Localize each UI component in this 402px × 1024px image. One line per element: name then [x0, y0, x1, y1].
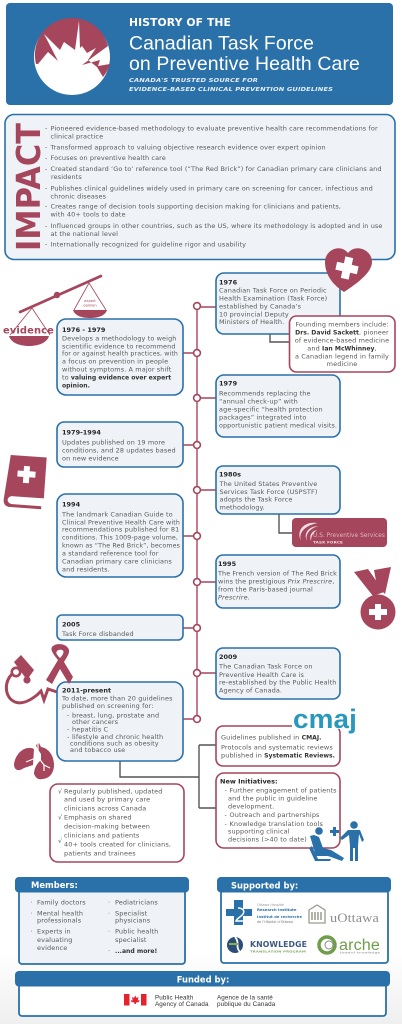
event: 1994: 1994 [62, 501, 81, 509]
event: 2011-present: - [67, 725, 70, 733]
panel: members: · [30, 909, 33, 917]
callout: new initiatives: Outreach and partnerships [230, 811, 320, 819]
funder name: Agence de la santé [217, 994, 273, 1002]
tagline: EVIDENCE-BASED CLINICAL PREVENTION GUIDELINES [129, 87, 333, 93]
callout: tools and reach: and used by primary care [64, 796, 150, 804]
icon: Canadian flag [124, 994, 146, 1006]
impact list: clinical practice [50, 132, 103, 140]
callout: new initiatives: development. [228, 802, 274, 810]
logo: Knowledge Translation Program: KNOWLEDGE [250, 940, 307, 949]
event: 2011-present: To date, more than 20 guidelines [61, 695, 173, 703]
callout: new initiatives [216, 773, 340, 848]
event: 1976-1979: Develops a methodology to weigh [62, 334, 177, 342]
impact list: - [45, 154, 48, 162]
event: 1995: The French version of The Red Brick [217, 570, 337, 578]
event: 1979: packages” integrated into [219, 414, 306, 422]
callout: tools and reach: √ [58, 837, 63, 845]
panel: members: evidence [37, 944, 67, 952]
event: 2009 [216, 648, 340, 699]
panel: members: · [108, 898, 110, 906]
callout: publications: Guidelines published in CMAJ. [221, 733, 321, 741]
event: 1980s: methodology. [220, 503, 265, 511]
impact list: Internationally recognized for guideline rigor and usability [50, 240, 246, 248]
event: 1994 [57, 494, 183, 577]
callout: new initiatives: supporting clinical [228, 828, 290, 836]
event: 2011-present: hepatitis C [72, 725, 108, 733]
callout: tools and reach: √ [58, 788, 63, 796]
panel: members: Pediatricians [115, 898, 158, 906]
panel: members: ...and more! [115, 948, 157, 955]
panel: members: Family doctors [37, 898, 86, 906]
event: 2011-present [57, 682, 183, 761]
panel: members: Specialist [115, 909, 148, 917]
logo: U.S. Preventive Services Task Force [292, 518, 387, 547]
panel: members: · [108, 928, 110, 936]
icon: maple leaf logo [34, 18, 110, 95]
event: 1979: 1979 [219, 380, 238, 388]
impact list: Focuses on preventive health care [50, 154, 166, 162]
event: 1976: 1976 [219, 279, 238, 287]
callout: new initiatives: and the public in guideline [228, 794, 318, 802]
logo: arche: arche [339, 937, 380, 954]
funder name: publique du Canada [217, 1001, 276, 1008]
event: 2005: Task Force disbanded [61, 630, 134, 638]
event: 2011-present: breast, lung, prostate and [72, 712, 159, 720]
event: 1976-1979: 1976 - 1979 [62, 326, 106, 334]
panel: members: Members: [31, 880, 78, 890]
event: 2009: The Canadian Task Force on [218, 663, 313, 671]
event: 1976: Health Examination (Task Force) [219, 294, 327, 302]
event: 1994: The landmark Canadian Guide to [61, 510, 173, 518]
impact list [45, 124, 383, 248]
impact list: - [45, 184, 48, 192]
panel: funded by [15, 971, 390, 1016]
logo: Ottawa Hospital Research Institute [226, 900, 302, 925]
callout: new initiatives: - [224, 820, 228, 828]
callout: founding members: a Canadian legend in family [295, 352, 389, 360]
logo: uOttawa: uOttawa [330, 911, 379, 925]
panel: members: Public health [115, 928, 158, 936]
panel: members: Experts in [37, 928, 71, 936]
impact list: at the national level [50, 230, 118, 238]
impact list: with 40+ tools to date [50, 211, 126, 219]
icon: medal [354, 567, 396, 630]
event: 1976-1979: to valuing evidence over expert [62, 374, 171, 382]
event: 1995 [216, 555, 340, 608]
callout: new initiatives: decisions (>40 to date) [228, 836, 307, 844]
event: 1976-1979: scientific evidence to recommend [62, 342, 176, 350]
impact list: - [45, 124, 48, 132]
impact list: - [45, 144, 48, 152]
impact list: Transformed approach to valuing objective research evidence over expert opinion [50, 144, 326, 152]
impact list: Creates range of decision tools supporting decision making for clinicians and patients, [50, 203, 341, 211]
panel: members: specialist [115, 936, 147, 944]
callout: founding members: and Ian McWhinney, [307, 344, 377, 352]
panel: members: Mental health [37, 909, 83, 917]
heading: IMPACT: IMPACT [9, 123, 48, 251]
callout: publications: Protocols and systematic reviews [221, 744, 333, 752]
panel: members: · [108, 909, 110, 917]
event: 2009: re-established by the Public Health [219, 679, 336, 687]
logo: Ottawa Hospital Research Institute: Institut de recherche [257, 914, 302, 919]
event: 1994: conditions. This 1009-page volume, [62, 534, 178, 542]
event: 1976-1979 [57, 319, 183, 395]
event: 1995: Prescrire. [218, 594, 250, 602]
event: 1979-1994: Updates published on 19 more [62, 438, 165, 446]
funder name: Public Health [155, 994, 194, 1002]
event: 1980s: Services Task Force (USPSTF) [220, 488, 318, 496]
callout: tools and reach: Emphasis on shared [64, 813, 132, 821]
callout: tools and reach: √ [58, 813, 63, 821]
callout: new initiatives: - [224, 786, 228, 794]
event: 2011-present: lifestyle and chronic health [72, 733, 163, 741]
event: 1994: and residents. [62, 566, 110, 574]
impact list: chronic diseases [50, 192, 107, 200]
tagline: CANADA'S TRUSTED SOURCE FOR [129, 78, 258, 84]
event: 1976: established by Canada’s [219, 302, 302, 310]
event: 2011-present: and tobacco use [70, 746, 125, 754]
icon: heart with cross [325, 248, 372, 292]
callout: new initiatives: New Initiatives: [220, 777, 278, 785]
icon: awareness ribbon [46, 644, 73, 684]
impact list: Created standard ‘Go to’ reference tool (“The Red Brick”) for Canadian primary care clinicians and [50, 165, 382, 173]
logo: Ottawa Hospital Research Institute: Research Institute [257, 907, 297, 912]
event: 1976-1979: without symptoms. A major shift [62, 365, 172, 373]
event: 1976-1979: a focus on prevention in people [62, 358, 168, 366]
impact list: Pioneered evidence-based methodology to evaluate preventive health care recommendations for [50, 124, 378, 132]
event: 2011-present: conditions such as obesity [70, 740, 159, 748]
panel: members: physicians [115, 917, 151, 925]
callout: founding members: medicine [327, 360, 357, 368]
callout: tools and reach: patients and trainees [64, 849, 136, 857]
logo: Knowledge Translation Program: TRANSLATION PROGRAM [250, 950, 306, 954]
event: 1994: known as “The Red Brick”, becomes [62, 542, 180, 550]
event: 1980s: adopts the Task Force [220, 495, 292, 503]
callout: founding members: of evidence-based medicine [295, 336, 389, 344]
event: 2005 [57, 615, 183, 640]
event: 1979-1994: 1979-1994 [62, 429, 101, 437]
panel: supported by: Supported by: [231, 880, 298, 890]
impact list: Influenced groups in other countries, such as the US, where its methodology is adopted and in use [50, 222, 383, 230]
icon: scale, evidence outweighs expert opinion: expert [84, 299, 96, 303]
event: 1994: recommendations published for 81 [62, 526, 179, 534]
icon: scale, evidence outweighs expert opinion [3, 276, 107, 346]
funder name: Agency of Canada [155, 1001, 209, 1008]
event: 1979: Recommends replacing the [219, 389, 311, 397]
callout: tools and reach: Regularly published, updated [64, 788, 163, 796]
logo: Knowledge Translation Program [227, 937, 307, 954]
event: 2011-present: - [67, 712, 70, 720]
logo: Ottawa Hospital Research Institute: Ottawa Hospital [257, 903, 284, 907]
event: 1976: Ministers of Health. [219, 318, 284, 326]
logo: uOttawa [309, 905, 379, 925]
event: 1979-1994 [57, 422, 183, 467]
logo: U.S. Preventive Services Task Force: U.S. Preventive Services [313, 532, 385, 539]
event: 1976-1979: opinion. [62, 383, 90, 390]
event: 1994: a standard reference tool for [62, 550, 159, 558]
callout: new initiatives: Further engagement of patients [230, 786, 337, 794]
callout: tools and reach: clinicians across Canada [64, 805, 146, 813]
logo: Ottawa Hospital Research Institute: de l’Hôpital d’Ottawa [257, 920, 293, 924]
event: 1994: Clinical Preventive Health Care with [62, 518, 180, 526]
impact list: Publishes clinical guidelines widely used in primary care on screening for cancer, infectious and [50, 184, 373, 192]
event: 1979: opportunistic patient medical visits. [219, 422, 337, 430]
title: Canadian Task Force [129, 32, 314, 54]
panel: members: evaluating [37, 936, 72, 944]
panel: supported by [217, 877, 391, 963]
impact list: - [45, 203, 48, 211]
event: 2005: 2005 [62, 620, 81, 628]
impact list: residents [51, 173, 82, 181]
panel: members: · [108, 947, 110, 955]
event: 2011-present: 2011-present [62, 687, 111, 695]
impact list: - [45, 222, 48, 230]
connectors [120, 334, 292, 808]
callout: new initiatives: - [224, 811, 228, 819]
impact list: - [45, 240, 48, 248]
callout: new initiatives: Knowledge translation tools [230, 820, 323, 828]
event: 2011-present: other cancers [72, 718, 119, 726]
event: 1979-1994: conditions, and 28 updates based [62, 446, 176, 454]
event: 1980s [216, 466, 340, 514]
timeline axis [183, 303, 216, 722]
event: 1994: Canadian primary care clinicians [62, 558, 172, 566]
event: 1980s: The United States Preventive [218, 480, 317, 488]
icon: scale, evidence outweighs expert opinion: evidence [3, 326, 54, 336]
panel: impact [5, 114, 395, 260]
logo: U.S. Preventive Services Task Force: TASK FORCE [313, 540, 343, 544]
callout: tools and reach: 40+ tools created for clinicians, [64, 841, 171, 849]
event: 2009: Agency of Canada. [219, 686, 282, 694]
event: 1995: wins the prestigious Prix Prescrire, [218, 578, 334, 586]
logo: arche: toward knowledge [340, 950, 380, 954]
event: 2011-present: published on screening for: [62, 702, 154, 710]
callout: publications: published in Systematic Reviews. [221, 752, 335, 760]
callout: founding members: Drs. David Sackett, pioneer [295, 329, 389, 337]
event: 1979 [216, 375, 340, 437]
callout: tools and reach: decision-making between [64, 823, 150, 831]
panel: members: professionals [37, 917, 82, 925]
event: 1980s: 1980s [219, 470, 241, 478]
logo: CMAJ: cmaj [293, 704, 357, 734]
panel: members: · [30, 928, 33, 936]
icon: stethoscope with heartbeat [6, 655, 57, 703]
impact list: - [45, 165, 48, 173]
title [129, 17, 360, 75]
event: 1976: Canadian Task Force on Periodic [219, 287, 327, 295]
callout: tools and reach [50, 784, 184, 862]
header banner [6, 3, 393, 105]
title: on Preventive Health Care [129, 53, 360, 75]
callout: publications [216, 726, 340, 766]
event: 1995: 1995 [218, 560, 237, 568]
icon: lungs [14, 742, 54, 779]
icon: red brick book [3, 455, 47, 509]
panel: funded by: Funded by: [177, 974, 229, 984]
title: HISTORY OF THE [129, 17, 231, 29]
event: 1976-1979: for or against health practices, with [62, 350, 178, 358]
logo: arche [319, 937, 380, 954]
event: 1995: from the Paris-based journal [218, 586, 313, 594]
callout: founding members: Founding members include: [295, 321, 389, 329]
event: 1979-1994: on new evidence [62, 454, 119, 462]
event: 1976: 10 provincial Deputy [219, 310, 289, 318]
event: 2009: Preventive Health Care is [219, 671, 305, 679]
event: 2009: 2009 [219, 653, 238, 661]
funder name [155, 994, 276, 1008]
icon: patient and doctor [309, 821, 364, 861]
tagline [129, 78, 333, 93]
event: 1979: “annual check-up” with [219, 398, 298, 406]
event: 1976 [216, 273, 340, 334]
panel: members [15, 877, 189, 964]
callout: tools and reach: clinicians and patients [64, 832, 140, 840]
event: 2011-present: - [67, 733, 70, 741]
icon: scale, evidence outweighs expert opinion: opinion [83, 304, 97, 308]
callout: founding members [290, 316, 395, 372]
event: 1979: age-specific “health protection [219, 406, 323, 414]
panel: members: · [30, 898, 33, 906]
